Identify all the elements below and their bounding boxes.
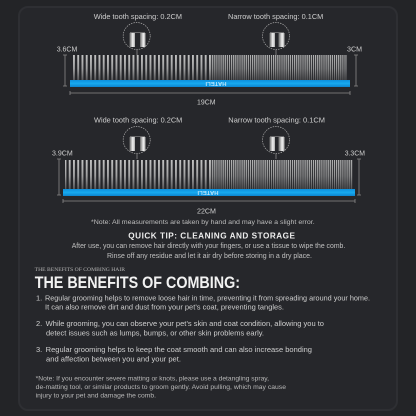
benefit 2: 2. bbox=[36, 319, 42, 328]
quick tip text bbox=[72, 243, 345, 260]
comb 2 left height bbox=[52, 148, 73, 195]
callout: comb 1 wide spacing bbox=[94, 12, 182, 55]
comb 2 length: 22CM bbox=[197, 206, 216, 216]
comb 2 teeth bbox=[65, 160, 353, 189]
callout: comb 1 narrow spacing bbox=[228, 12, 323, 55]
comb 1 right height bbox=[347, 44, 362, 86]
comb 2 right height bbox=[345, 148, 365, 195]
detangling note: *Note: If you encounter severe matting or knots, please use a detangling spray, bbox=[36, 375, 269, 382]
comb 1 left height: 3.6CM bbox=[57, 44, 77, 54]
small section label: THE BENEFITS OF COMBING HAIR bbox=[35, 268, 126, 273]
comb 1 length bbox=[70, 91, 350, 106]
comb 1 bbox=[57, 44, 362, 106]
benefit 3: and affection between you and your pet. bbox=[46, 354, 181, 364]
callout: comb 1 wide spacing: Wide tooth spacing: 0.2CM bbox=[94, 12, 182, 21]
comb 1 blue spine bbox=[70, 80, 350, 87]
comb 2 blue spine bbox=[63, 189, 355, 196]
measurement note: *Note: All measurements are taken by hand and may have a slight error. bbox=[91, 219, 315, 226]
comb 1 brand: HATELI bbox=[205, 80, 226, 86]
comb 1 length: 19CM bbox=[197, 98, 216, 106]
benefit 3: 3. bbox=[36, 345, 42, 354]
benefit 2: detect issues such as lumps, bumps, or other skin problems early. bbox=[46, 328, 264, 338]
benefit 2: While grooming, you can observe your pet’s skin and coat condition, allowing you to bbox=[46, 319, 324, 328]
benefit 1: It can also remove dirt and dust from your pet’s coat, preventing tangles. bbox=[45, 303, 284, 312]
benefit 3 bbox=[36, 345, 312, 364]
quick tip heading: QUICK TIP: CLEANING AND STORAGE bbox=[128, 232, 296, 240]
comb 1 left height bbox=[57, 44, 77, 86]
callout: comb 2 wide spacing: Wide tooth spacing: 0.2CM bbox=[94, 116, 182, 125]
comb 2 left height: 3.9CM bbox=[52, 148, 73, 158]
benefit 1 bbox=[36, 293, 370, 312]
benefit 1: Regular grooming helps to remove loose hair in time, preventing it from spreading around your home. bbox=[45, 293, 370, 302]
detangling note bbox=[36, 375, 287, 400]
callout: comb 2 narrow spacing bbox=[228, 116, 325, 159]
callout: comb 2 wide spacing bbox=[94, 116, 182, 159]
callout: comb 2 narrow spacing: Narrow tooth spacing: 0.1CM bbox=[228, 116, 325, 125]
comb 2 right height: 3.3CM bbox=[345, 148, 365, 158]
benefit 1: 1. bbox=[36, 293, 42, 302]
quick tip text: Rinse off any residue and let it air dry before storing in a dry place. bbox=[107, 253, 312, 260]
benefit 3: Regular grooming helps to keep the coat smooth and can also increase bonding bbox=[46, 345, 312, 354]
comb 1 teeth bbox=[73, 55, 347, 80]
comb 2 length bbox=[63, 199, 355, 216]
benefit 2 bbox=[36, 319, 324, 338]
detangling note: injury to your pet and damage the comb. bbox=[36, 392, 156, 400]
comb 2 bbox=[52, 148, 365, 216]
comb 1 right height: 3CM bbox=[347, 44, 362, 54]
benefits heading: THE BENEFITS OF COMBING: bbox=[35, 274, 240, 292]
comb 2 brand: HATELI bbox=[197, 189, 218, 195]
callout: comb 1 narrow spacing: Narrow tooth spacing: 0.1CM bbox=[228, 12, 323, 21]
quick tip text: After use, you can remove hair directly with your fingers, or use a tissue to wipe the comb. bbox=[72, 243, 345, 250]
detangling note: de-matting tool, or similar products to groom gently. Avoid pulling, which may cause bbox=[36, 384, 287, 391]
